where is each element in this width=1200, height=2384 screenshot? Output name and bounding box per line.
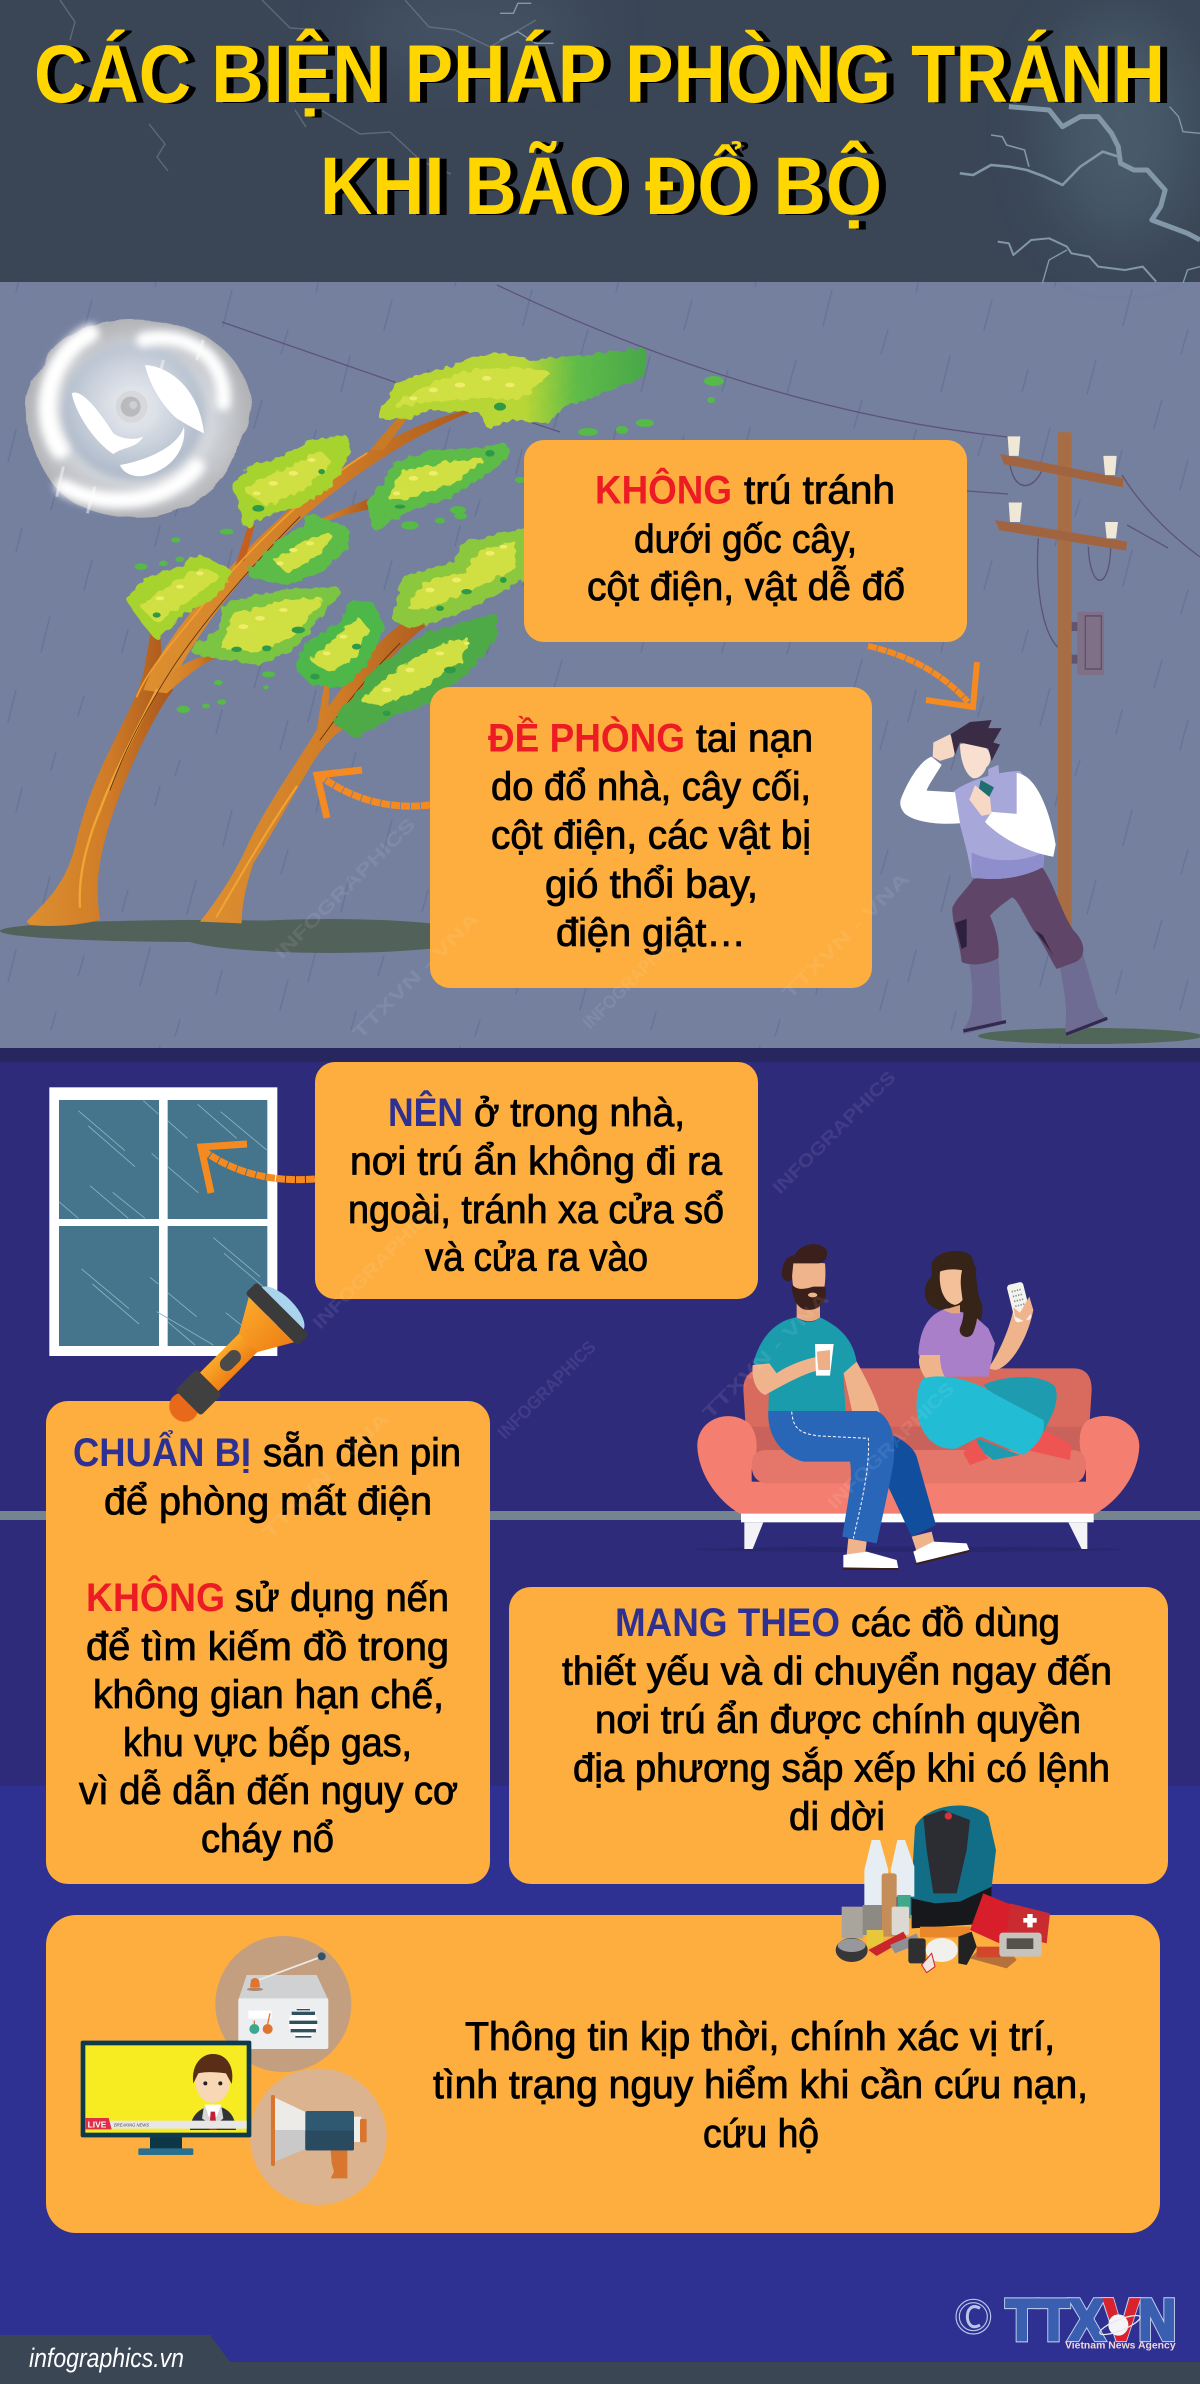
bottles	[864, 1840, 914, 1907]
ground shadow under man	[978, 1028, 1200, 1044]
panel: flashlight and candles box: vì dễ dẫn đến nguy cơ	[79, 1768, 458, 1813]
title text	[34, 29, 1165, 232]
title text: KHI BÃO ĐỔ BỘ	[320, 141, 882, 232]
window panes	[59, 1100, 267, 1346]
panel: flashlight and candles box: để phòng mất điện	[104, 1480, 432, 1524]
panel: bring essentials box	[509, 1587, 1168, 1884]
agency tagline: Vietnam News Agency	[1065, 2341, 1176, 2352]
right arm	[985, 773, 1056, 857]
title shadow	[41, 30, 1172, 233]
pole crossarms	[995, 454, 1127, 551]
copyright mark	[956, 2299, 991, 2334]
floor shadow	[693, 1547, 1120, 1552]
megaphone	[271, 2095, 367, 2178]
illustration: utility pole	[995, 432, 1127, 967]
panel: accident prevention box: tai nạn	[696, 716, 813, 760]
hair	[951, 720, 1002, 761]
radio circle	[215, 1936, 351, 2072]
sofa	[697, 1368, 1139, 1549]
TTXVN wordmark: TTXVN	[1006, 2288, 1176, 2352]
TV news screen: BREAKING NEWS	[114, 2123, 149, 2128]
illustration: wind-bent trees	[27, 353, 642, 926]
panel: flashlight and candles box	[46, 1401, 490, 1884]
panel: do not shelter box	[524, 440, 967, 642]
background: rain streaks	[0, 282, 1200, 1050]
panel: bring essentials box: địa phương sắp xếp khi có lệnh	[573, 1746, 1110, 1790]
trousers	[952, 867, 1083, 969]
panel: accident prevention box: ĐỀ PHÒNG	[488, 714, 685, 760]
panel: stay indoors box: ngoài, tránh xa cửa sổ	[348, 1188, 724, 1232]
radio	[238, 1952, 328, 2049]
globe	[1108, 2314, 1128, 2336]
watermarks: INFOGRAPHICS	[271, 814, 419, 963]
wind-blown leaves	[135, 513, 467, 713]
icon: typhoon	[26, 320, 251, 518]
TTXVN wordmark outline: TTXVN	[1006, 2288, 1176, 2352]
panel: accident prevention box: do đổ nhà, cây cối,	[491, 765, 811, 809]
pole electrical box	[1072, 612, 1104, 675]
lightning in the header	[60, 0, 1200, 283]
panel: flashlight and candles box: sẵn đèn pin	[263, 1430, 461, 1475]
woman	[917, 1251, 1072, 1465]
blown leaves near box	[450, 376, 724, 514]
panel: timely information box: Thông tin kịp thời, chính xác vị trí,	[465, 2015, 1055, 2059]
watermarks: INFOGRAPHICS	[824, 1378, 958, 1513]
arrow: box to tree	[317, 770, 430, 818]
background: header band	[0, 0, 1200, 282]
remote control	[1006, 1281, 1032, 1323]
panel: flashlight and candles box: sử dụng nến	[235, 1576, 449, 1620]
watermarks: INFOGRAPHICS	[309, 1198, 443, 1333]
panel: bring essentials box: di dời	[789, 1795, 885, 1839]
icon: flashlight	[148, 1274, 317, 1443]
power wires	[222, 285, 1200, 557]
backpack	[912, 1806, 996, 1928]
foliage speckles	[156, 376, 515, 692]
panel: stay indoors box: ở trong nhà,	[474, 1091, 685, 1135]
background: lower blue section	[0, 1786, 1200, 2384]
megaphone circle	[250, 2068, 387, 2205]
arrow: box to man	[868, 646, 977, 707]
illustration: radio, TV and megaphone	[81, 1936, 387, 2205]
panel: do not shelter box: dưới gốc cây,	[634, 518, 857, 562]
panel: stay indoors box	[315, 1062, 758, 1299]
arrow: box to window	[201, 1144, 315, 1193]
panel: flashlight and candles box: không gian hạn chế,	[93, 1673, 444, 1717]
foliage clusters	[132, 353, 642, 733]
panel: stay indoors box: và cửa ra vào	[425, 1236, 648, 1280]
vest	[953, 771, 1044, 879]
watermarks	[259, 814, 958, 1543]
tree trunks and branches	[27, 405, 490, 926]
panel: stay indoors box: NÊN	[388, 1089, 463, 1135]
globe ring	[1098, 2312, 1142, 2338]
pole post	[1058, 432, 1072, 967]
TV news screen: LIVE	[88, 2119, 107, 2129]
typhoon eye	[116, 391, 148, 423]
panel: accident prevention box	[430, 687, 872, 988]
man	[752, 1244, 969, 1569]
watermarks: TTXVN - VNA	[259, 1408, 393, 1543]
watermarks: TTXVN - VNA	[779, 868, 913, 1003]
raised hand	[933, 734, 958, 761]
typhoon blades	[72, 365, 204, 476]
panel: accident prevention box: gió thổi bay,	[545, 862, 758, 906]
logo: TTXVN copyright	[956, 2288, 1176, 2352]
panel: bring essentials box: MANG THEO	[615, 1601, 840, 1645]
footer website text: infographics.vn	[29, 2343, 184, 2373]
supplies	[836, 1873, 1050, 1973]
pole wire loops	[1010, 465, 1111, 648]
TV news screen	[81, 2041, 251, 2155]
panel: timely information box: cứu hộ	[703, 2112, 819, 2156]
floor line	[0, 1511, 1200, 1520]
phone and hand	[969, 780, 994, 816]
watermarks: INFOGRAPHICS	[769, 1067, 900, 1198]
illustration: emergency kit	[836, 1806, 1050, 1973]
trunk highlights	[80, 453, 400, 917]
background: indoor section	[0, 1048, 1200, 1788]
window	[49, 1087, 277, 1356]
foliage highlights	[143, 370, 547, 703]
boots	[963, 955, 1107, 1036]
title shadow: KHI BÃO ĐỔ BỘ	[327, 142, 889, 233]
dark leaf marks	[153, 403, 507, 716]
background: storm section	[0, 282, 1200, 1050]
illustration: man in the storm	[900, 720, 1107, 1036]
illustration: couple on sofa	[693, 1244, 1139, 1569]
panel: do not shelter box: trú tránh	[744, 468, 895, 512]
panel: bring essentials box: nơi trú ẩn được chính quyền	[595, 1698, 1081, 1742]
watermarks: TTXVN - VNA	[699, 1288, 833, 1423]
panel: stay indoors box: nơi trú ẩn không đi ra	[350, 1140, 723, 1184]
title	[34, 29, 1172, 233]
panel: flashlight and candles box: KHÔNG	[86, 1574, 225, 1620]
panel: accident prevention box: cột điện, các vật bị	[491, 814, 811, 858]
ground shadow under trees	[0, 919, 480, 953]
panel: flashlight and candles box: khu vực bếp gas,	[123, 1721, 412, 1765]
watermarks: INFOGRAPHICS	[494, 1337, 600, 1443]
panel: do not shelter box: cột điện, vật dễ đổ	[587, 564, 905, 609]
panel: accident prevention box: điện giật…	[556, 911, 746, 955]
watermarks: TTXVN - VNA	[349, 908, 483, 1043]
panel: do not shelter box: KHÔNG	[595, 466, 732, 512]
panel: bring essentials box: thiết yếu và di chuyển ngay đến	[562, 1650, 1112, 1694]
background: dark strip below storm section	[0, 1048, 1200, 1062]
panel: flashlight and candles box: CHUẨN BỊ	[73, 1428, 251, 1475]
panel: bring essentials box: các đồ dùng	[851, 1601, 1060, 1645]
panel: flashlight and candles box: để tìm kiếm đồ trong	[86, 1625, 449, 1669]
face	[960, 742, 991, 778]
footer bar	[0, 2335, 1200, 2384]
panel: flashlight and candles box: cháy nổ	[201, 1817, 334, 1861]
left arm	[900, 757, 960, 824]
watermarks: INFOGRAPHICS	[579, 927, 685, 1033]
panel: timely information box	[46, 1915, 1160, 2233]
pole insulators	[1008, 436, 1118, 538]
panel: timely information box: tình trạng nguy hiểm khi cần cứu nạn,	[433, 2063, 1088, 2107]
